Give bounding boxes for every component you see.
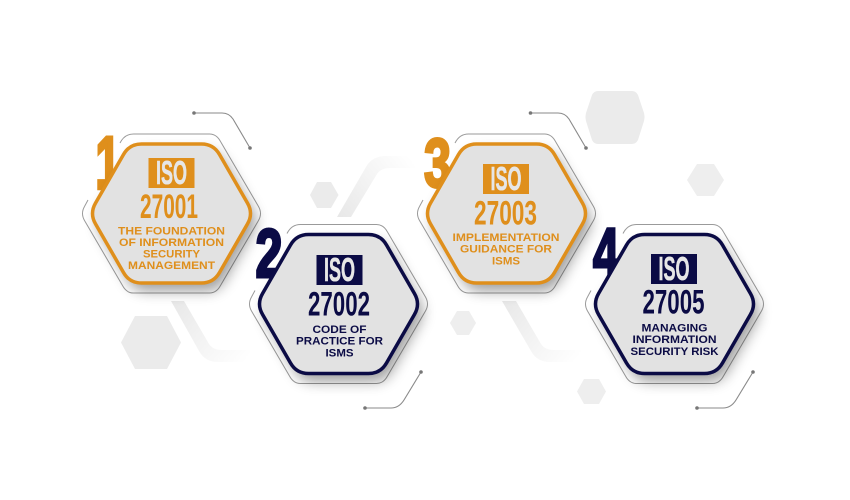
description: GUIDANCE FOR bbox=[460, 244, 552, 256]
ISO label: ISO bbox=[156, 154, 187, 191]
description: INFORMATION bbox=[633, 334, 717, 346]
ISO badge bbox=[316, 255, 362, 285]
description: OF INFORMATION bbox=[119, 237, 224, 249]
hexagon shadow bbox=[432, 152, 590, 291]
panel: ISO 27003 bbox=[418, 124, 596, 293]
hexagon shadow bbox=[600, 242, 758, 382]
panel: ISO 27005 bbox=[586, 214, 764, 384]
description bbox=[296, 324, 383, 360]
description bbox=[452, 232, 560, 268]
panel: ISO 27001 bbox=[82, 122, 260, 293]
description: ISMS bbox=[325, 348, 354, 360]
number 2: 2 bbox=[256, 215, 282, 292]
hexagon body bbox=[260, 234, 418, 374]
standard number: 27001 bbox=[140, 188, 198, 226]
hexagon outline bbox=[586, 224, 764, 384]
description: ISMS bbox=[492, 256, 520, 268]
number 1: 1 bbox=[96, 122, 120, 204]
connector lines bbox=[192, 111, 755, 410]
standard number: 27005 bbox=[642, 284, 704, 322]
ISO label: ISO bbox=[324, 251, 355, 288]
description: THE FOUNDATION bbox=[118, 226, 225, 238]
description: MANAGING bbox=[642, 322, 708, 334]
number 3: 3 bbox=[424, 124, 451, 202]
hexagon outline bbox=[418, 134, 596, 293]
number 4: 4 bbox=[593, 214, 619, 292]
standard number: 27003 bbox=[474, 194, 537, 232]
standard number: 27002 bbox=[308, 286, 370, 324]
ISO badge bbox=[148, 158, 194, 188]
ISO label: ISO bbox=[658, 250, 689, 287]
description: PRACTICE FOR bbox=[296, 336, 383, 348]
hexagon shadow bbox=[98, 152, 256, 291]
hexagon body bbox=[428, 144, 586, 283]
panel: ISO 27002 bbox=[250, 215, 428, 384]
description: SECURITY RISK bbox=[630, 346, 719, 358]
description bbox=[630, 322, 719, 358]
description: MANAGEMENT bbox=[128, 260, 215, 272]
ISO label: ISO bbox=[490, 160, 521, 197]
ISO badge bbox=[651, 254, 697, 284]
description: IMPLEMENTATION bbox=[452, 232, 560, 244]
hexagon body bbox=[596, 234, 754, 374]
hexagon shadow bbox=[264, 242, 422, 382]
description bbox=[118, 226, 225, 272]
hexagon body bbox=[92, 144, 250, 283]
ISO badge bbox=[483, 164, 529, 194]
description: CODE OF bbox=[312, 324, 367, 336]
hexagon outline bbox=[82, 134, 260, 293]
hexagon outline bbox=[250, 224, 428, 384]
description: SECURITY bbox=[143, 248, 201, 260]
background hexagons bbox=[121, 91, 724, 404]
decorative curved bands bbox=[171, 156, 582, 362]
